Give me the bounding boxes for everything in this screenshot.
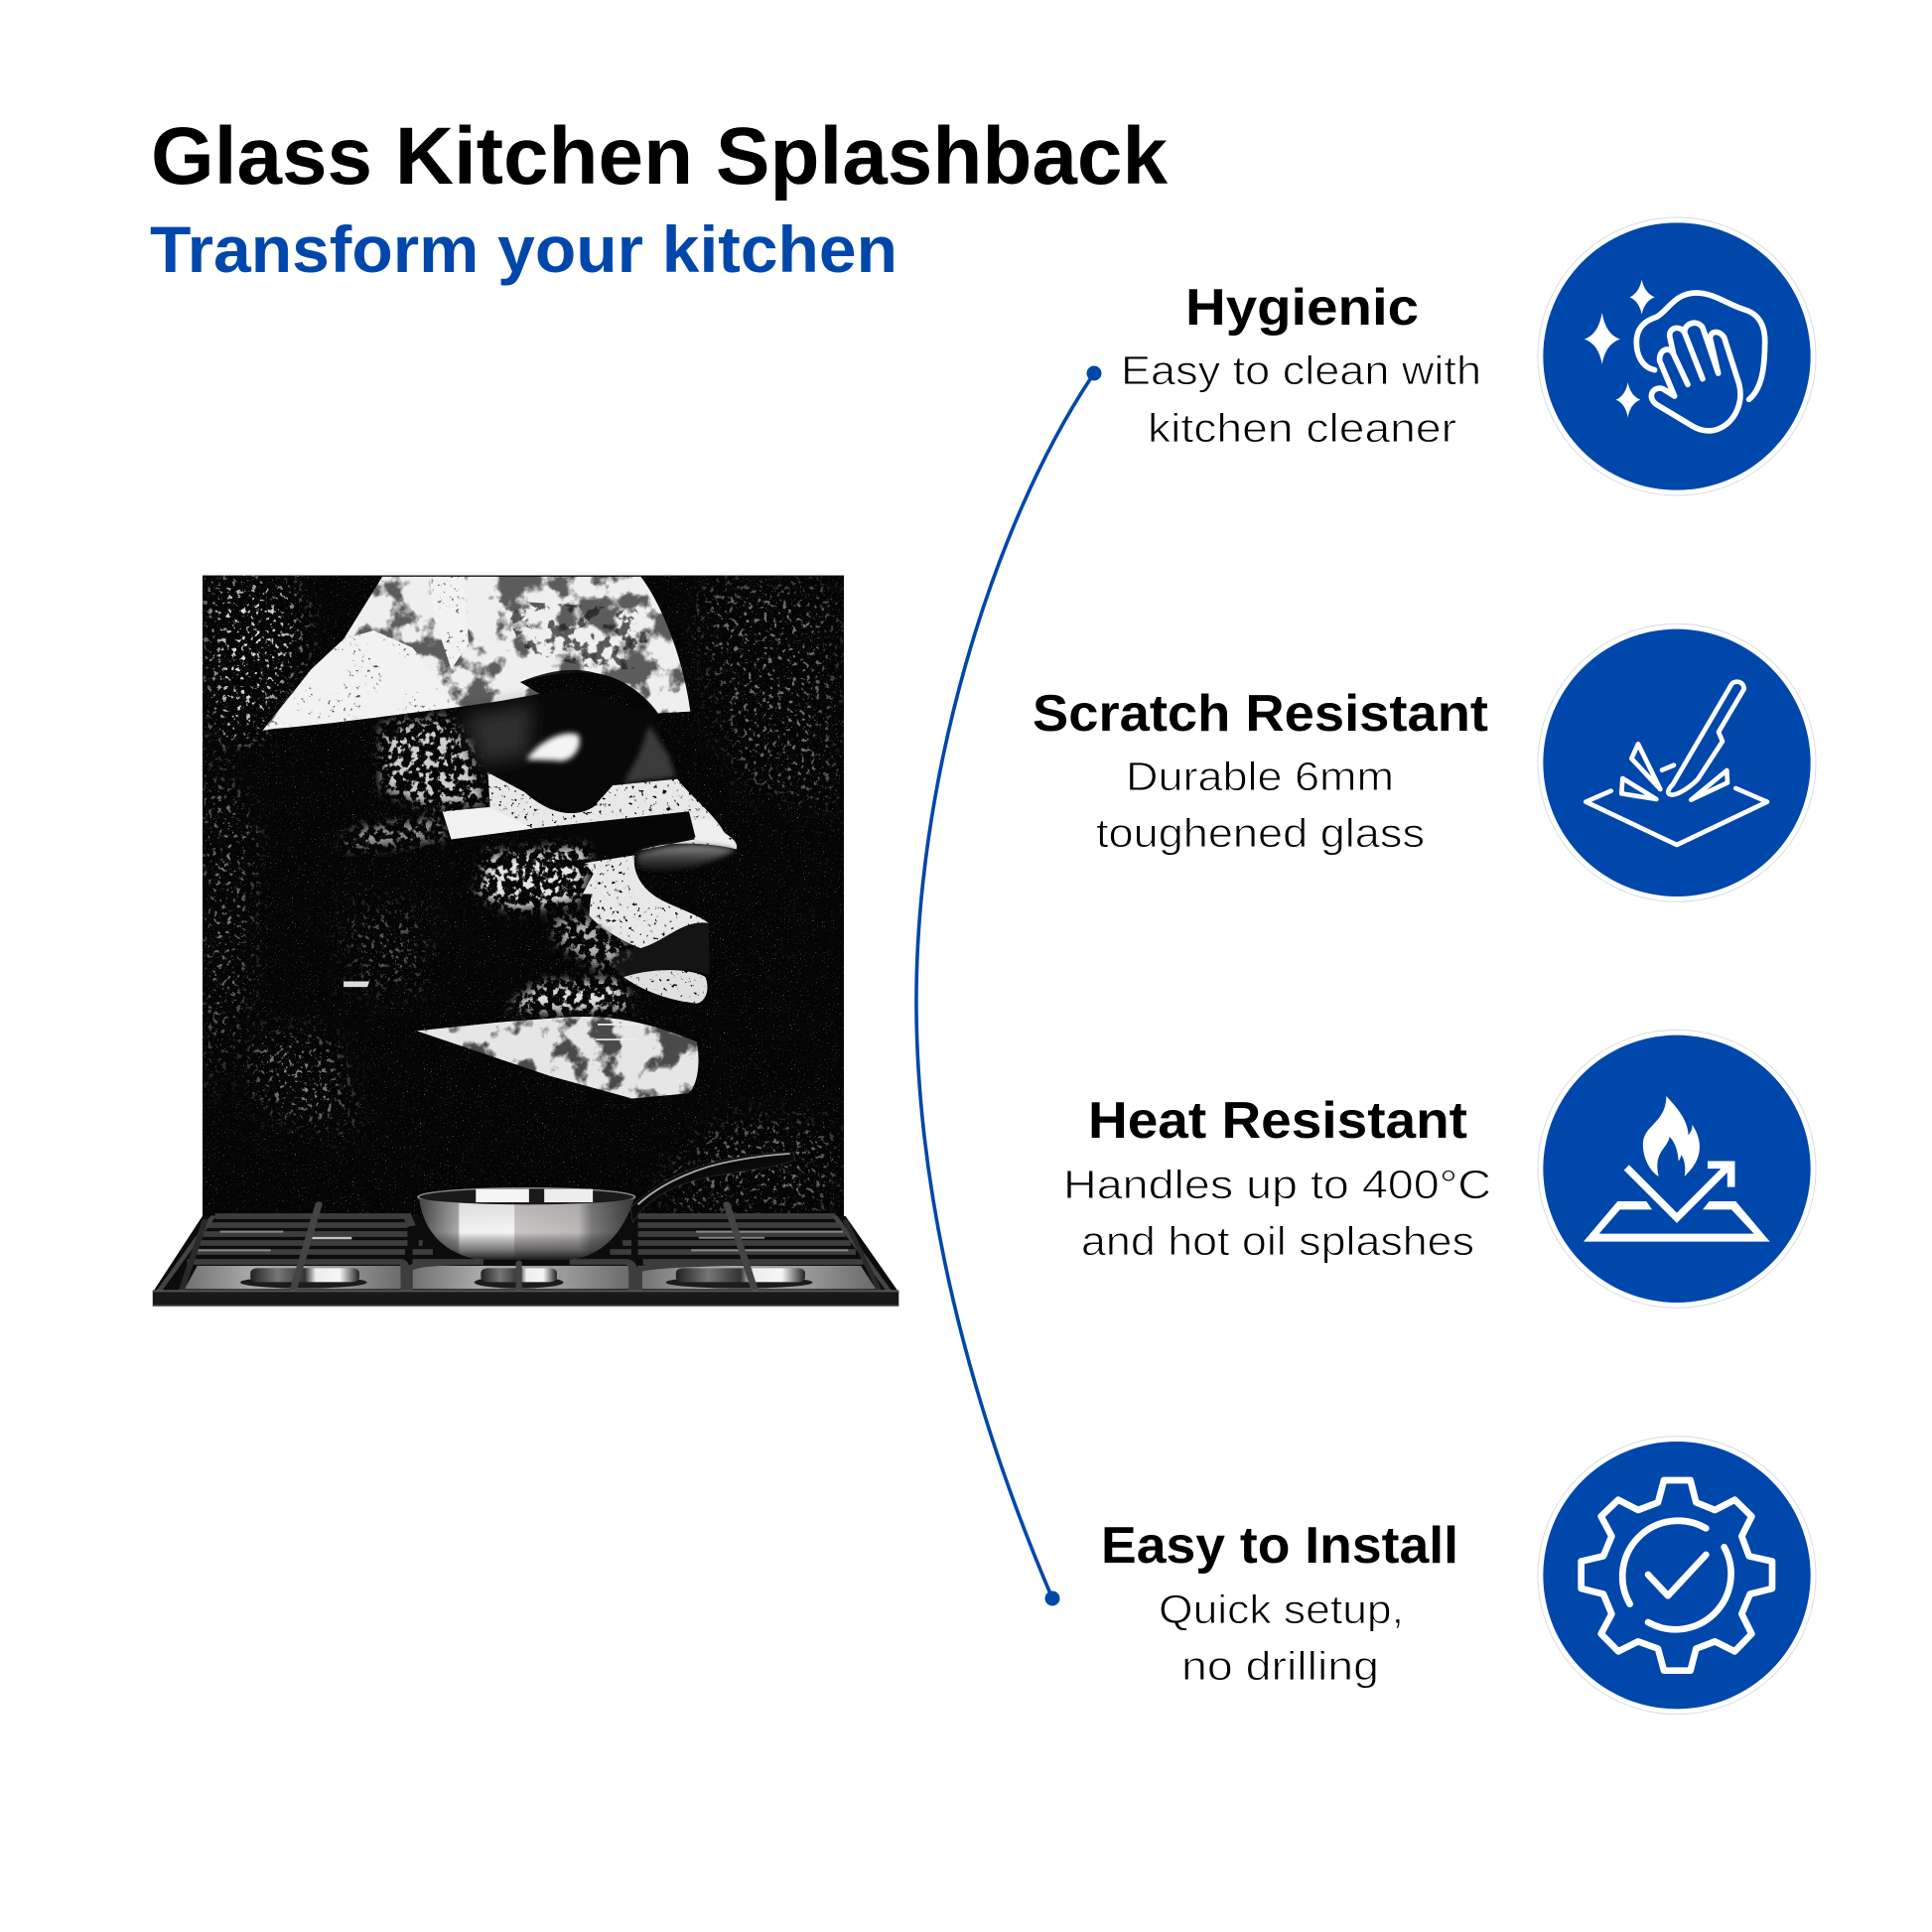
glass panel: abstract face artwork xyxy=(203,576,844,1221)
reflective trays xyxy=(185,1266,876,1289)
heading: Hygienic xyxy=(1185,279,1419,337)
heading: Heat Resistant xyxy=(1088,1092,1467,1150)
product image: splashback with cooktop xyxy=(153,576,898,1307)
description xyxy=(1096,754,1425,856)
description: Easy to clean with xyxy=(1121,347,1481,393)
fine speckle texture xyxy=(203,576,844,1217)
front lip xyxy=(153,1290,898,1307)
mid-face texture patches xyxy=(344,846,632,1014)
pan body xyxy=(419,1198,634,1260)
burners xyxy=(240,1233,813,1289)
feature: Heat Resistant xyxy=(1063,1092,1491,1264)
dark band across the nose xyxy=(533,811,695,857)
description xyxy=(1063,1162,1491,1264)
grate highlights xyxy=(195,1232,848,1250)
frying pan xyxy=(418,1153,795,1260)
connector curve with end dots xyxy=(916,365,1102,1606)
hob surface xyxy=(153,1216,898,1293)
pan handle xyxy=(630,1153,795,1223)
heading: Scratch Resistant xyxy=(1033,685,1488,743)
description: kitchen cleaner xyxy=(1148,405,1456,451)
description: toughened glass xyxy=(1096,810,1425,856)
icon: flame over deflecting heat arrow xyxy=(1538,1030,1816,1308)
description xyxy=(1159,1587,1404,1689)
cheek strip and nose bridge xyxy=(340,772,737,850)
title: Glass Kitchen Splashback xyxy=(151,111,1168,202)
upper lip and cheek bright fragment xyxy=(583,855,710,977)
heading: Easy to Install xyxy=(1101,1517,1458,1575)
description xyxy=(1121,347,1481,451)
pan rim and interior xyxy=(418,1188,634,1206)
feature: Easy to Install xyxy=(1101,1517,1458,1689)
forehead fragment xyxy=(263,577,690,731)
description: Handles up to 400°C xyxy=(1063,1162,1491,1207)
gas cooktop xyxy=(153,1153,898,1307)
feature: Scratch Resistant xyxy=(1033,685,1488,856)
grate bars xyxy=(187,1216,864,1290)
cross bars and rails xyxy=(159,1204,889,1291)
icon: knife scratching glass xyxy=(1538,623,1816,901)
icon: gear with check mark xyxy=(1538,1437,1816,1715)
nose tip and nostril xyxy=(623,845,736,910)
lower lip xyxy=(623,970,708,1004)
feature: Hygienic xyxy=(1121,279,1481,451)
chin fragment xyxy=(417,1017,698,1098)
description: no drilling xyxy=(1181,1643,1379,1689)
description: Durable 6mm xyxy=(1126,754,1394,799)
icon: hand wiping with sparkles xyxy=(1538,217,1816,495)
description: and hot oil splashes xyxy=(1081,1218,1474,1264)
subtitle: Transform your kitchen xyxy=(150,212,897,286)
description: Quick setup, xyxy=(1159,1587,1404,1632)
eye band xyxy=(382,689,675,818)
